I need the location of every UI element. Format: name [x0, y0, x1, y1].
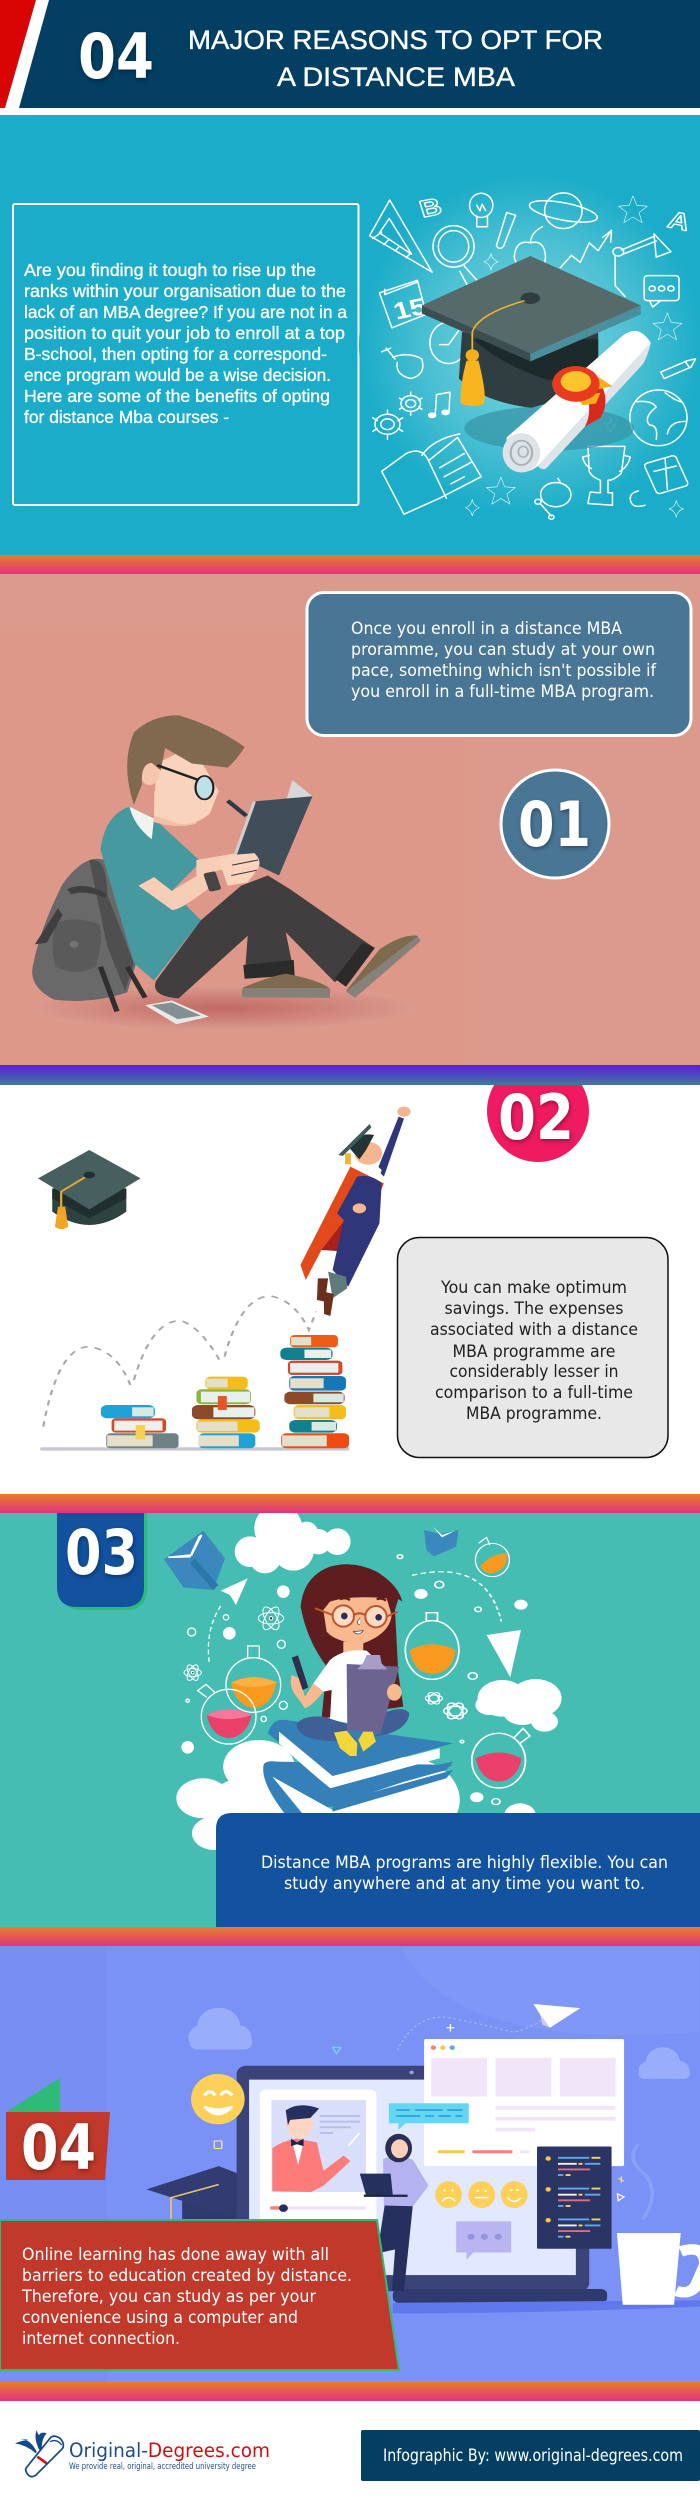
callout: reason 04 text: internet connection. [22, 2329, 180, 2349]
logo tagline: We provide real, original, accredited university degree [69, 2462, 256, 2472]
illustration: speech bubbles [389, 2103, 511, 2260]
callout: reason 01 text: Once you enroll in a distance MBA [351, 619, 622, 639]
illustration: code panel [537, 2147, 612, 2249]
callout: reason 02 text: MBA programme. [466, 1404, 602, 1424]
illustration: top cloud [181, 1504, 351, 1754]
graduation cap [422, 256, 641, 451]
illustration: book stacks [40, 1335, 350, 1451]
callout: reason 02 text: associated with a distance [430, 1320, 638, 1340]
callout: reason 03 text: study anywhere and at any time you want to. [284, 1874, 645, 1894]
number badge 02: 02 [498, 1081, 574, 1154]
first book stack [101, 1405, 179, 1448]
panel: reason 04 [0, 1946, 700, 2382]
callout: reason 03 text: Distance MBA programs are highly flexible. You can [261, 1853, 668, 1873]
footer logo: Original-Degrees.com [15, 2430, 270, 2477]
illustration: floating book, left [164, 1531, 225, 1590]
illustration: paper plane, right [487, 1630, 521, 1677]
student [100, 715, 421, 998]
intro text box: Here are some of the benefits of opting [24, 386, 330, 406]
callout: reason 02 text: You can make optimum [440, 1278, 627, 1298]
header title: A DISTANCE MBA [277, 62, 515, 92]
footer credit box [361, 2430, 700, 2481]
number tag 04: 04 [21, 2111, 96, 2184]
illustration: graduation cap [146, 2166, 250, 2227]
number tag 04 [6, 2078, 110, 2184]
callout: reason 02 text: comparison to a full-time [435, 1383, 633, 1403]
icon: graduation cap [38, 1150, 141, 1229]
diploma scroll with seal [503, 331, 651, 472]
illustration: clouds and paper plane [188, 1947, 700, 2201]
illustration: girl with clipboard [291, 1564, 409, 1756]
callout: reason 01 text [307, 592, 691, 736]
illustration: dashed arc and atoms, left [184, 1605, 287, 1722]
callout: reason 02 text: savings. The expenses [444, 1299, 624, 1319]
illustration: teacher video card [260, 2089, 376, 2225]
callout: reason 01 text: you enroll in a full-time MBA program. [351, 682, 654, 702]
panel: reason 01 [0, 574, 700, 1066]
callout: reason 04 text: convenience using a computer and [22, 2308, 298, 2328]
callout: reason 04 text: barriers to education created by distance. [22, 2266, 352, 2286]
white doodle icons: B [416, 193, 445, 223]
illustration: dashed arc and small bubbles, right [397, 1555, 501, 1805]
intro text box: B-school, then opting for a correspond- [24, 344, 327, 364]
logo wordmark: Original-Degrees.com [69, 2439, 270, 2462]
panel: reason 02 [38, 1085, 669, 1458]
illustration: dashed jump path [43, 1296, 316, 1427]
panel: reason 03 [0, 1504, 700, 1927]
intro text box: Are you finding it tough to rise up the [24, 260, 316, 280]
number badge 01 [501, 770, 609, 878]
number tab 03: 03 [65, 1516, 138, 1589]
intro text box: lack of an MBA degree? If you are not in a [24, 302, 347, 322]
white doodle icons: 15 [390, 293, 430, 325]
smartphone [145, 1000, 209, 1024]
illustration: graduation cap, diploma and doodles [359, 173, 700, 519]
intro text box [13, 204, 358, 505]
header banner [0, 0, 700, 108]
callout: reason 02 text [398, 1238, 668, 1458]
illustration: student with laptop [360, 2134, 429, 2291]
white doodle icons: A [665, 206, 693, 236]
callout: reason 01 text: proramme, you can study at your own [351, 640, 655, 660]
header number 04: 04 [78, 20, 154, 93]
callout: reason 03 text [216, 1813, 700, 1927]
illustration: coffee mug [617, 2144, 700, 2305]
callout: reason 04 text [0, 2220, 399, 2370]
illustration: browser window [424, 2039, 624, 2166]
intro text box: ence program would be a wise decision. [24, 365, 331, 385]
intro text box: ranks within your organisation due to the [24, 281, 346, 301]
illustration: lower clouds [176, 1589, 562, 1850]
illustration: flasks, right [405, 1537, 530, 1788]
header title [188, 25, 603, 92]
illustration: flying graduate in red cape [300, 1107, 411, 1316]
white doodle icons [370, 193, 695, 519]
illustration: laptop [237, 2066, 700, 2313]
illustration: stacked books [263, 1720, 453, 1815]
icon: diploma with quill [15, 2430, 63, 2477]
header title: MAJOR REASONS TO OPT FOR [188, 25, 603, 55]
callout: reason 02 text: considerably lesser in [450, 1362, 618, 1382]
callout: reason 04 text: Therefore, you can study as per your [21, 2287, 316, 2307]
illustration: rating faces [191, 2074, 528, 2208]
illustration: paper plane, left [221, 1578, 248, 1605]
panel: introduction [0, 115, 700, 557]
backpack [32, 859, 145, 1011]
callout: reason 01 text: pace, something which isn't possible if [351, 661, 657, 681]
intro text box: position to quit your job to enroll at a top [24, 323, 345, 343]
intro text box: for distance Mba courses - [24, 407, 229, 427]
number badge 01: 01 [518, 788, 591, 861]
illustration: flasks, left [198, 1646, 281, 1744]
callout: reason 02 text: MBA programme are [452, 1342, 616, 1362]
third book stack [280, 1335, 349, 1448]
callout: reason 04 text: Online learning has done away with all [22, 2245, 329, 2265]
second book stack [192, 1377, 260, 1448]
illustration: floating book, right [424, 1527, 458, 1557]
number tab 03 [57, 1513, 147, 1610]
illustration: student reading with backpack [27, 715, 421, 1031]
